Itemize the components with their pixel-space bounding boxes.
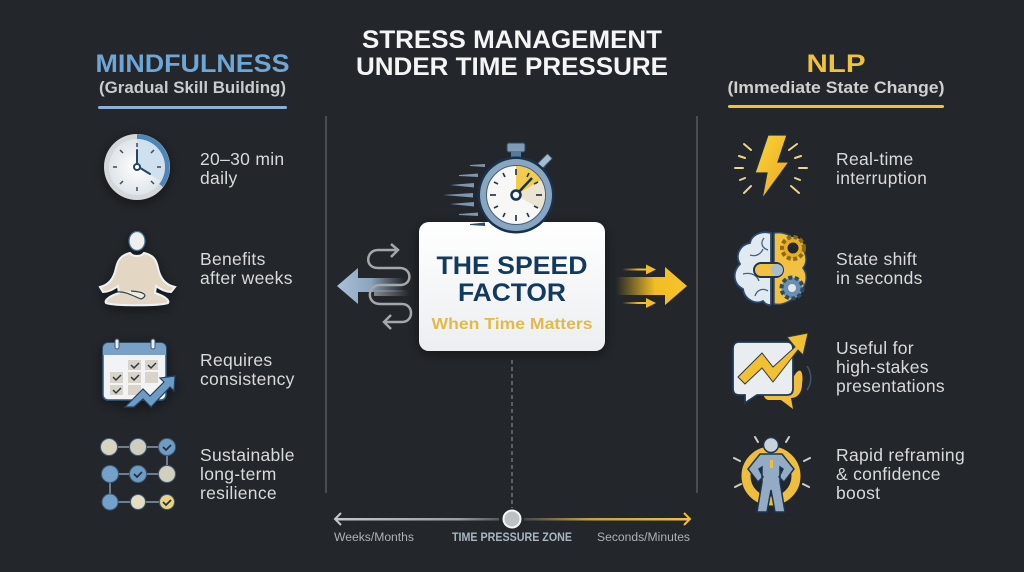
card: the speed factor <box>419 222 605 351</box>
mindfulness heading: MINDFULNESS <box>96 50 290 78</box>
text: real-time interruption: Real-time <box>836 149 914 169</box>
text: requires consistency: consistency <box>200 369 295 389</box>
nlp heading: (Immediate State Change) <box>728 78 944 97</box>
title: STRESS MANAGEMENT <box>362 26 662 54</box>
text: rapid reframing and confidence boost: Rapid reframing <box>836 445 965 465</box>
card: the speed factor: FACTOR <box>458 279 566 307</box>
text: requires consistency: Requires <box>200 350 272 370</box>
icon: brain with gears <box>735 232 806 305</box>
icon: lightning bolt <box>735 135 807 199</box>
text: useful for high-stakes presentations: high-stakes <box>836 357 929 377</box>
text: sustainable long-term resilience: long-term <box>200 464 277 484</box>
arrow: right fast <box>616 264 687 308</box>
text: real-time interruption: interruption <box>836 168 927 188</box>
icon: calendar with trend arrow <box>103 339 175 407</box>
icon: speech bubble with growth arrow <box>733 333 811 409</box>
icon: stopwatch <box>443 143 554 234</box>
text: benefits after weeks: Benefits <box>200 249 266 269</box>
timeline: TIME PRESSURE ZONE <box>452 532 572 544</box>
panel: mindfulness <box>96 50 295 510</box>
panel: nlp <box>728 50 965 512</box>
icon: habit network <box>100 438 176 510</box>
mindfulness heading: (Gradual Skill Building) <box>99 78 286 97</box>
icon: meditating person <box>100 232 175 305</box>
text: rapid reframing and confidence boost: boost <box>836 483 880 503</box>
text: benefits after weeks: after weeks <box>200 268 293 288</box>
text: sustainable long-term resilience: resilience <box>200 483 277 503</box>
title: UNDER TIME PRESSURE <box>356 53 668 81</box>
text: rapid reframing and confidence boost: & confidence <box>836 464 941 484</box>
text: useful for high-stakes presentations: presentations <box>836 376 945 396</box>
arrow: left slow winding <box>337 244 411 329</box>
panel divider lines <box>326 116 697 493</box>
card: the speed factor: THE SPEED <box>436 252 588 280</box>
icon: confident figure <box>734 437 810 512</box>
panel: center <box>334 143 690 544</box>
text: state shift in seconds: in seconds <box>836 268 923 288</box>
text: sustainable long-term resilience: Sustainable <box>200 445 295 465</box>
mindfulness heading <box>96 50 290 109</box>
text: state shift in seconds: State shift <box>836 249 917 269</box>
title <box>356 26 668 81</box>
text: 20-30 min daily: daily <box>200 168 238 188</box>
nlp heading <box>728 50 944 108</box>
text: 20-30 min daily: 20–30 min <box>200 149 284 169</box>
nlp heading: NLP <box>806 50 866 78</box>
text: useful for high-stakes presentations: Useful for <box>836 338 914 358</box>
icon: clock <box>104 134 170 200</box>
timeline <box>334 360 690 544</box>
timeline: Weeks/Months <box>334 532 414 544</box>
timeline: Seconds/Minutes <box>597 532 690 544</box>
card: the speed factor: When Time Matters <box>432 316 593 333</box>
